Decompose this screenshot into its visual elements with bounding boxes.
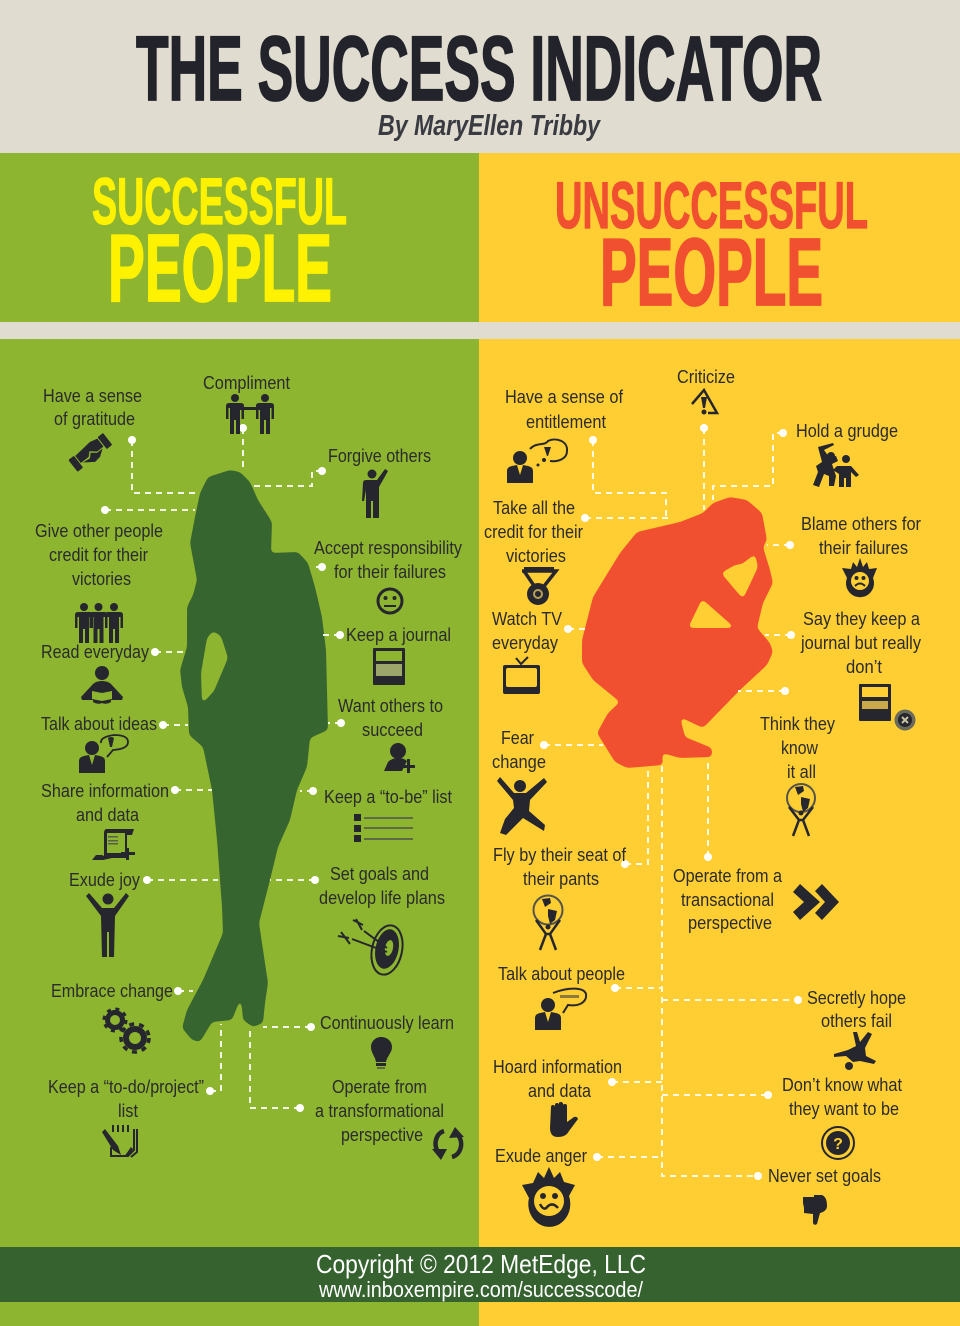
icon: angry face bbox=[842, 558, 877, 597]
text: give other people credit: victories bbox=[72, 568, 131, 589]
text: accept responsibility: for their failures bbox=[334, 561, 446, 582]
text: think they know it all bbox=[760, 713, 836, 782]
text: give other people credit: credit for their bbox=[49, 544, 148, 565]
text: don't know what bbox=[782, 1074, 902, 1119]
text: have a sense of gratitude: Have a sense bbox=[43, 385, 142, 406]
footer band bbox=[0, 1247, 960, 1302]
connectors: unsuccessful bbox=[540, 424, 802, 1180]
text: keep a to-do list: list bbox=[118, 1100, 138, 1121]
text: watch tv bbox=[492, 608, 563, 653]
icon: light bulb bbox=[371, 1037, 392, 1069]
text: give other people credit bbox=[35, 520, 163, 589]
text: talk about people: Talk about people bbox=[498, 963, 625, 984]
panel: successful traits bbox=[0, 339, 479, 1326]
text: blame others bbox=[801, 513, 921, 558]
text: want others to succeed: succeed bbox=[362, 719, 423, 740]
text: secretly hope others fail bbox=[807, 987, 906, 1031]
panel: unsuccessful traits bbox=[479, 339, 960, 1326]
text: talk about ideas: Talk about ideas bbox=[41, 713, 157, 734]
text: fly by their seat bbox=[493, 844, 627, 889]
icon: journal bbox=[373, 648, 405, 685]
icon: neutral face bbox=[378, 589, 402, 613]
text: fear change: Fear bbox=[501, 727, 534, 748]
icon: three men bbox=[75, 603, 123, 643]
text: have a sense of entitlement: entitlement bbox=[526, 411, 606, 432]
text: set goals bbox=[319, 863, 445, 908]
icon: scroll bbox=[92, 829, 135, 860]
text: take all the credit: victories bbox=[506, 545, 566, 566]
text: operate from transformational: Operate from bbox=[332, 1076, 427, 1097]
text: criticize: Criticize bbox=[677, 366, 735, 387]
text: never set goals: Never set goals bbox=[768, 1165, 881, 1186]
text: keep a to-do list bbox=[48, 1076, 204, 1121]
icon: warning triangle bbox=[692, 390, 717, 414]
text: have a sense of gratitude: of gratitude bbox=[54, 408, 135, 429]
text: forgive others: Forgive others bbox=[328, 445, 431, 466]
text: operate from transactional bbox=[673, 865, 783, 933]
text: secretly hope others fail: Secretly hope bbox=[807, 987, 906, 1008]
icon: television bbox=[503, 657, 540, 694]
text: operate from transactional: Operate from a bbox=[673, 865, 783, 886]
text: blame others: Blame others for bbox=[801, 513, 921, 534]
icon: two people shaking hands bbox=[226, 394, 274, 434]
silhouette: crouching man bbox=[582, 497, 773, 768]
icon: person reading bbox=[81, 666, 123, 704]
text: share information: Share information bbox=[41, 780, 169, 801]
copyright: Copyright © 2012 MetEdge, LLC bbox=[316, 1249, 646, 1279]
panel: successful people banner bbox=[0, 153, 479, 322]
text: watch tv: everyday bbox=[492, 632, 559, 653]
text: compliment: Compliment bbox=[203, 372, 290, 393]
icon: person with thought bubble bbox=[507, 439, 567, 483]
text: watch tv: Watch TV bbox=[492, 608, 563, 629]
text: give other people credit: Give other people bbox=[35, 520, 163, 541]
text: say they keep a journal: don’t bbox=[846, 656, 882, 677]
icon: add person bbox=[384, 743, 415, 773]
text: exude joy: Exude joy bbox=[69, 869, 141, 890]
text: think they know it all: Think they bbox=[760, 713, 836, 734]
text: hoard information bbox=[493, 1056, 622, 1101]
icon: fighting figures bbox=[813, 443, 859, 487]
text: exude anger: Exude anger bbox=[495, 1145, 587, 1166]
text: operate from transactional: transactional bbox=[681, 889, 774, 910]
text: accept responsibility bbox=[314, 537, 463, 582]
text: say they keep a journal: Say they keep a bbox=[803, 608, 921, 629]
silhouette: standing woman bbox=[180, 470, 328, 1042]
icon: person with speech bubble bbox=[535, 989, 586, 1030]
text: say they keep a journal bbox=[800, 608, 922, 677]
text: share information bbox=[41, 780, 169, 825]
icon: atlas with globe bbox=[534, 896, 562, 950]
text: embrace change: Embrace change bbox=[51, 980, 173, 1001]
text: want others to succeed bbox=[338, 695, 443, 740]
icon: target with arrows bbox=[338, 919, 407, 978]
text: accept responsibility: Accept responsibility bbox=[314, 537, 463, 558]
text: read everyday: Read everyday bbox=[41, 641, 150, 662]
text: operate from transformational: a transformational bbox=[315, 1100, 444, 1121]
text: fly by their seat: Fly by their seat of bbox=[493, 844, 627, 865]
heading: people: PEOPLE bbox=[108, 215, 332, 322]
text: keep a to-do list: Keep a “to-do/project” bbox=[48, 1076, 204, 1097]
connectors: successful bbox=[101, 424, 345, 1112]
icon: raised hand bbox=[550, 1102, 578, 1137]
icon: journal with x bbox=[859, 684, 916, 730]
text: continuously learn: Continuously learn bbox=[320, 1012, 454, 1033]
icon: question mark circle: ? bbox=[833, 1136, 843, 1153]
icon: rotating arrows bbox=[432, 1127, 464, 1160]
text: have a sense of entitlement: Have a sense of bbox=[505, 386, 624, 407]
icon: handshake bbox=[68, 432, 114, 474]
icon: notepad and pencil bbox=[102, 1125, 137, 1157]
text: hoard information: Hoard information bbox=[493, 1056, 622, 1077]
text: say they keep a journal: journal but really bbox=[800, 632, 922, 653]
text: hold a grudge: Hold a grudge bbox=[796, 420, 898, 441]
text: think they know it all: it all bbox=[787, 761, 816, 782]
text: blame others: their failures bbox=[819, 537, 908, 558]
text: secretly hope others fail: others fail bbox=[821, 1010, 892, 1031]
text: keep a to-be list: Keep a “to-be” list bbox=[324, 786, 452, 807]
icon: angry grin face bbox=[522, 1167, 575, 1227]
byline: By MaryEllen Tribby bbox=[378, 110, 601, 142]
text: take all the credit: Take all the bbox=[493, 497, 575, 518]
icon: list bbox=[354, 814, 413, 842]
text: want others to succeed: Want others to bbox=[338, 695, 443, 716]
heading: successful: SUCCESSFUL bbox=[92, 164, 347, 238]
icon: medal bbox=[522, 567, 556, 605]
icon: double chevron bbox=[793, 884, 839, 920]
text: keep a journal: Keep a journal bbox=[346, 624, 451, 645]
text: hoard information: and data bbox=[528, 1080, 592, 1101]
text: fear change: change bbox=[492, 751, 546, 772]
text: set goals: develop life plans bbox=[319, 887, 445, 908]
text: operate from transformational: perspective bbox=[341, 1124, 423, 1145]
header bbox=[136, 18, 822, 142]
text: operate from transactional: perspective bbox=[688, 912, 772, 933]
text: take all the credit: credit for their bbox=[484, 521, 583, 542]
text: fear change bbox=[492, 727, 546, 772]
text: think they know it all: know bbox=[781, 737, 819, 758]
text: don't know what: Don’t know what bbox=[782, 1074, 902, 1095]
icon: thumbs down bbox=[803, 1195, 827, 1225]
text: operate from transformational bbox=[315, 1076, 444, 1145]
icon: person with raised arm bbox=[362, 469, 388, 518]
url: www.inboxempire.com/successcode/ bbox=[318, 1277, 644, 1302]
text: set goals: Set goals and bbox=[330, 863, 429, 884]
text: have a sense of entitlement bbox=[505, 386, 624, 432]
icon: person with idea bubble bbox=[79, 735, 128, 773]
text: have a sense of gratitude bbox=[43, 385, 142, 429]
icon: joyful person bbox=[86, 893, 129, 957]
icon: falling person bbox=[834, 1032, 876, 1070]
icon: gears bbox=[104, 1009, 149, 1052]
text: take all the credit bbox=[484, 497, 583, 566]
text: don't know what: they want to be bbox=[789, 1098, 899, 1119]
panel: unsuccessful people banner bbox=[479, 153, 960, 326]
icon: atlas with globe bbox=[787, 784, 815, 836]
text: fly by their seat: their pants bbox=[523, 868, 599, 889]
text: share information: and data bbox=[76, 804, 140, 825]
icon: question mark circle bbox=[822, 1127, 854, 1159]
icon: scared figure bbox=[497, 777, 547, 835]
